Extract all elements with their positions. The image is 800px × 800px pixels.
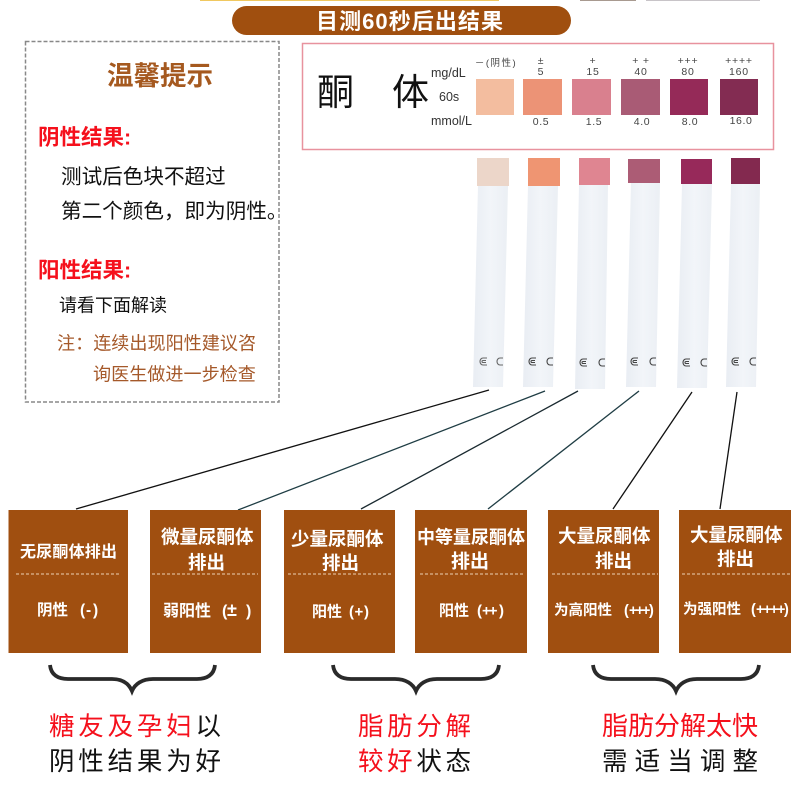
result box 5 xyxy=(548,510,659,653)
result box 2: 弱阳性 xyxy=(163,601,211,620)
top scale labels: ± xyxy=(538,55,544,67)
bottom scale labels: 0.5 xyxy=(533,116,549,128)
bottom scale labels: 4.0 xyxy=(634,116,650,128)
result box 1 xyxy=(8,510,128,653)
result box 3: 阳性 xyxy=(312,604,342,620)
result box 4: 阳性 xyxy=(439,602,469,620)
strip 1 xyxy=(473,158,509,387)
bottom scale labels: 16.0 xyxy=(730,115,752,127)
result box 3: ) xyxy=(364,604,369,620)
chart name: ketone: 体 xyxy=(392,72,429,113)
brace: negative and weak xyxy=(50,665,215,691)
strip 4 xyxy=(626,159,660,387)
result box 6: 为强阳性 xyxy=(683,601,741,618)
result box 2 xyxy=(150,510,261,653)
brace: strongly positive xyxy=(593,665,759,691)
result box 6: 大量尿酮体 xyxy=(690,524,783,546)
result box 2: ( xyxy=(222,603,228,620)
result box 5: 为高阳性 xyxy=(554,601,612,619)
result box 1: ) xyxy=(93,602,98,619)
result box 5: 排出 xyxy=(595,550,632,572)
row labels xyxy=(431,66,472,128)
result box 4 xyxy=(415,510,527,653)
result box 6: ( xyxy=(751,602,756,618)
top scale labels: 40 xyxy=(634,66,648,78)
result box 1: ( xyxy=(80,602,86,619)
conclusion: fat breakdown too fast xyxy=(602,711,758,776)
note: consult doctor: 询医生做进一步检查 xyxy=(93,364,256,384)
result box 3: 排出 xyxy=(322,552,359,574)
top scale labels: 5 xyxy=(538,66,544,78)
result box 6: ) xyxy=(784,602,789,618)
top scale labels: + + xyxy=(632,55,650,67)
result box 1: - xyxy=(86,602,91,619)
row labels: 60s xyxy=(439,90,459,104)
result box 4: ++ xyxy=(482,602,498,620)
note: consult doctor: 注：连续出现阳性建议咨 xyxy=(57,334,256,354)
result box 2: 微量尿酮体 xyxy=(161,526,254,548)
text: negative explanation: 测试后色块不超过 xyxy=(61,166,226,188)
conclusion: fat breakdown too fast: 脂肪分解太快 xyxy=(602,711,758,741)
result box 6: 排出 xyxy=(717,548,754,570)
panel: warm tips xyxy=(26,42,288,402)
conclusion: diabetics and pregnant women xyxy=(49,713,221,776)
result box 1: 阴性 xyxy=(37,600,68,619)
result box 3: ( xyxy=(349,604,354,620)
chart name: ketone xyxy=(317,72,429,113)
result box 1: 无尿酮体排出 xyxy=(20,543,117,561)
conclusion: diabetics and pregnant women: 糖友及孕妇以 xyxy=(49,713,221,741)
top scale labels: 15 xyxy=(586,66,600,78)
text: negative explanation: 第二个颜色，即为阴性。 xyxy=(61,200,288,223)
test strips xyxy=(473,158,760,389)
heading: warm tips: 温馨提示 xyxy=(107,61,213,91)
result box 5: +++ xyxy=(629,603,650,619)
row labels: mg/dL xyxy=(431,66,466,80)
title banner: 目测60秒后出结果 xyxy=(316,9,503,34)
result box 3: 少量尿酮体 xyxy=(291,528,384,550)
note: consult doctor xyxy=(57,334,256,384)
result box 5: 大量尿酮体 xyxy=(558,526,651,546)
bottom scale labels: 1.5 xyxy=(586,116,602,128)
chart name: ketone: 酮 xyxy=(317,72,354,113)
heading: positive result: 阳性结果: xyxy=(38,258,131,282)
top scale labels xyxy=(475,55,753,78)
top scale labels: 80 xyxy=(681,66,695,78)
top scale labels: 160 xyxy=(729,66,749,78)
panel: ketone colour chart xyxy=(302,44,774,150)
conclusion: fat breakdown good: 脂肪分解 xyxy=(358,713,471,741)
result box 4: ) xyxy=(499,602,504,620)
conclusion: fat breakdown too fast: 需适当调整 xyxy=(602,748,758,776)
heading: negative result: 阴性结果: xyxy=(38,126,131,150)
top scale labels: +++ xyxy=(678,55,698,67)
title banner xyxy=(232,6,571,35)
top scale labels: + xyxy=(590,55,596,67)
result box 4: 排出 xyxy=(451,550,489,572)
strip 5 xyxy=(677,159,712,388)
result box 2: ± xyxy=(227,600,237,620)
strip 2 xyxy=(523,158,560,387)
row labels: mmol/L xyxy=(431,114,472,128)
text: negative explanation xyxy=(61,166,288,223)
result box 6: ++++ xyxy=(756,602,785,618)
text: see below: 请看下面解读 xyxy=(59,296,167,316)
conclusion: fat breakdown good: 较好状态 xyxy=(358,748,471,776)
result box 5: ( xyxy=(624,603,629,619)
connector lines from strips to result boxes xyxy=(76,390,737,510)
result box 6 xyxy=(679,510,791,653)
conclusion: fat breakdown good xyxy=(358,713,471,776)
brace: positive xyxy=(333,665,499,691)
result box 3 xyxy=(284,510,395,653)
result box 2: 排出 xyxy=(188,552,225,573)
conclusion: diabetics and pregnant women: 阴性结果为好 xyxy=(49,748,221,776)
bottom scale labels xyxy=(533,115,752,128)
result box 4: ( xyxy=(477,602,482,620)
result box 5: ) xyxy=(649,603,654,619)
bottom scale labels: 8.0 xyxy=(682,116,698,128)
result box 4: 中等量尿酮体 xyxy=(417,526,525,548)
strip 6 xyxy=(726,158,760,387)
strip 3 xyxy=(575,158,610,389)
result box 3: + xyxy=(354,604,364,620)
top scale labels: ++++ xyxy=(725,55,753,67)
result box 2: ) xyxy=(246,603,251,620)
top scale labels: －(阴性) xyxy=(475,57,517,69)
colour swatches xyxy=(476,79,758,115)
